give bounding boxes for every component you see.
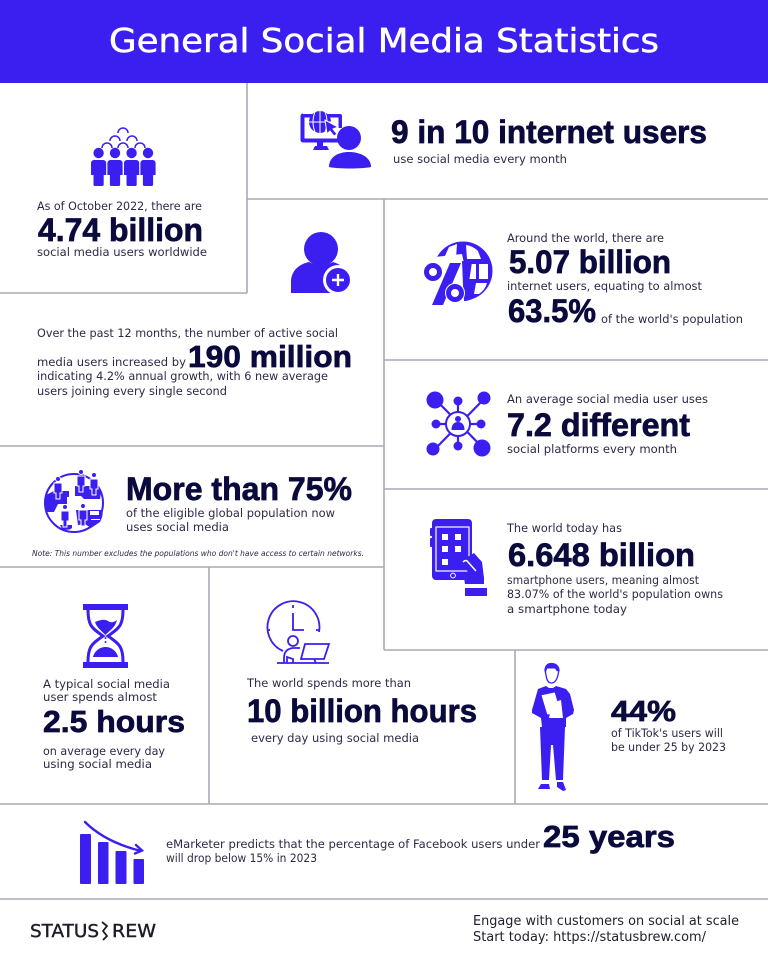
- text: 2.5 hours: on average every day: [43, 744, 165, 758]
- text: 4.74 billion: 4.74 billion: [38, 212, 203, 248]
- call to action: Engage with customers on social at scale: [473, 914, 739, 929]
- text: 190 million: media users increased by: [37, 355, 186, 369]
- text: 7.2 different: [507, 392, 708, 456]
- text: 190 million: users joining every single second: [37, 384, 227, 398]
- text: 44%: be under 25 by 2023: [611, 740, 726, 754]
- panel: 6.648 billion smartphones: [430, 519, 723, 616]
- text: 2.5 hours: using social media: [43, 757, 152, 771]
- text: 7.2 different: 7.2 different: [507, 407, 690, 443]
- call to action: Start today: https://statusbrew.com/: [473, 930, 707, 945]
- icon: user with plus: [291, 232, 353, 295]
- text: 9 in 10: [391, 114, 707, 166]
- icon: globe with percent: [425, 242, 492, 312]
- text: 5.07 billion: 63.5%: [508, 293, 596, 329]
- text: 4.74 billion: As of October 2022, there are: [37, 199, 202, 213]
- text: 10 billion hours: every day using social media: [251, 731, 419, 745]
- call to action: [473, 914, 739, 945]
- text: more than 75%: uses social media: [126, 520, 229, 534]
- title: General Social Media Statistics: [109, 21, 659, 60]
- text: 6.648 billion: The world today has: [506, 521, 622, 535]
- panel: 9 in 10 internet users: [300, 111, 707, 168]
- icon: monitor with globe and user: [300, 111, 371, 168]
- icon: globe with people: [45, 470, 103, 532]
- icon: hourglass: [83, 604, 128, 668]
- panel: Facebook users prediction: [80, 819, 675, 884]
- header banner: [0, 0, 768, 83]
- text: 4.74 billion: social media users worldwide: [37, 245, 207, 259]
- panel: 2.5 hours: [43, 604, 185, 771]
- icon: clock with person at laptop: [267, 601, 329, 663]
- text: prediction: [166, 819, 675, 865]
- text: 2.5 hours: 2.5 hours: [43, 704, 185, 739]
- text: 190 million: 190 million: [188, 339, 352, 374]
- text: more than 75%: of the eligible global population now: [126, 506, 335, 520]
- panel: 7.2 different platforms: [426, 392, 708, 456]
- text: 6.648 billion: 83.07% of the world's population owns: [507, 587, 723, 601]
- text: prediction: 25 years: [543, 819, 675, 854]
- text: 2.5 hours: A typical social media: [43, 677, 170, 691]
- panel: 44% TikTok users: [532, 663, 726, 791]
- text: 44%: of TikTok's users will: [611, 726, 723, 740]
- text: 5.07 billion: internet users, equating to almost: [507, 279, 702, 293]
- text: 5.07 billion: 5.07 billion: [509, 244, 671, 280]
- icon: standing person with book: [532, 663, 574, 791]
- text: prediction: eMarketer predicts that the percentage of Facebook users under: [166, 837, 540, 851]
- text: 2.5 hours: user spends almost: [43, 690, 157, 704]
- logo: Statusbrew: REW: [112, 922, 156, 942]
- text: 5.07 billion: [507, 231, 743, 329]
- panel: more than 75%: [32, 470, 364, 558]
- text: prediction: will drop below 15% in 2023: [166, 851, 317, 865]
- text: 190 million: indicating 4.2% annual growth, with 6 new average: [37, 369, 328, 383]
- icon: declining bar chart: [80, 822, 144, 884]
- text: 190 million: Over the past 12 months, the number of active social: [37, 326, 338, 340]
- text: 2.5 hours: [43, 677, 185, 771]
- panel: 5.07 billion internet users: [425, 231, 743, 329]
- icon: network around user: [426, 392, 490, 456]
- text: 10 billion hours: The world spends more than: [246, 676, 411, 690]
- text: 5.07 billion: Around the world, there are: [507, 231, 664, 245]
- text: 10 billion hours: 10 billion hours: [247, 693, 477, 729]
- text: 6.648 billion: 6.648 billion: [508, 537, 695, 573]
- note: Note: This number excludes the populations who don't have access to certain networks.: [32, 549, 364, 558]
- panel: 4.74 billion users: [37, 128, 207, 259]
- footer: [30, 914, 739, 945]
- panel: 10 billion hours: [246, 601, 477, 745]
- text: 7.2 different: social platforms every month: [507, 442, 677, 456]
- text: 4.74 billion: [37, 199, 207, 259]
- text: 9 in 10: use social media every month: [393, 152, 567, 166]
- logo: Statusbrew: [30, 922, 156, 942]
- text: 190 million: [37, 326, 352, 398]
- text: 6.648 billion: [506, 521, 723, 616]
- text: 44%: [611, 696, 726, 754]
- text: 10 billion hours: [246, 676, 477, 745]
- text: 6.648 billion: a smartphone today: [507, 602, 627, 616]
- panel: 190 million increase: [37, 232, 353, 398]
- text: more than 75%: More than 75%: [126, 471, 352, 507]
- text: 9 in 10: 9 in 10 internet users: [391, 114, 707, 150]
- text: more than 75%: [126, 471, 352, 534]
- text: 5.07 billion: of the world's population: [601, 312, 743, 326]
- icon: hand holding smartphone: [430, 519, 487, 596]
- logo: Statusbrew: STATUS: [30, 922, 99, 942]
- icon: crowd of people: [91, 128, 156, 186]
- text: 6.648 billion: smartphone users, meaning almost: [507, 573, 699, 587]
- text: 44%: 44%: [611, 696, 676, 728]
- text: 7.2 different: An average social media user uses: [507, 392, 708, 406]
